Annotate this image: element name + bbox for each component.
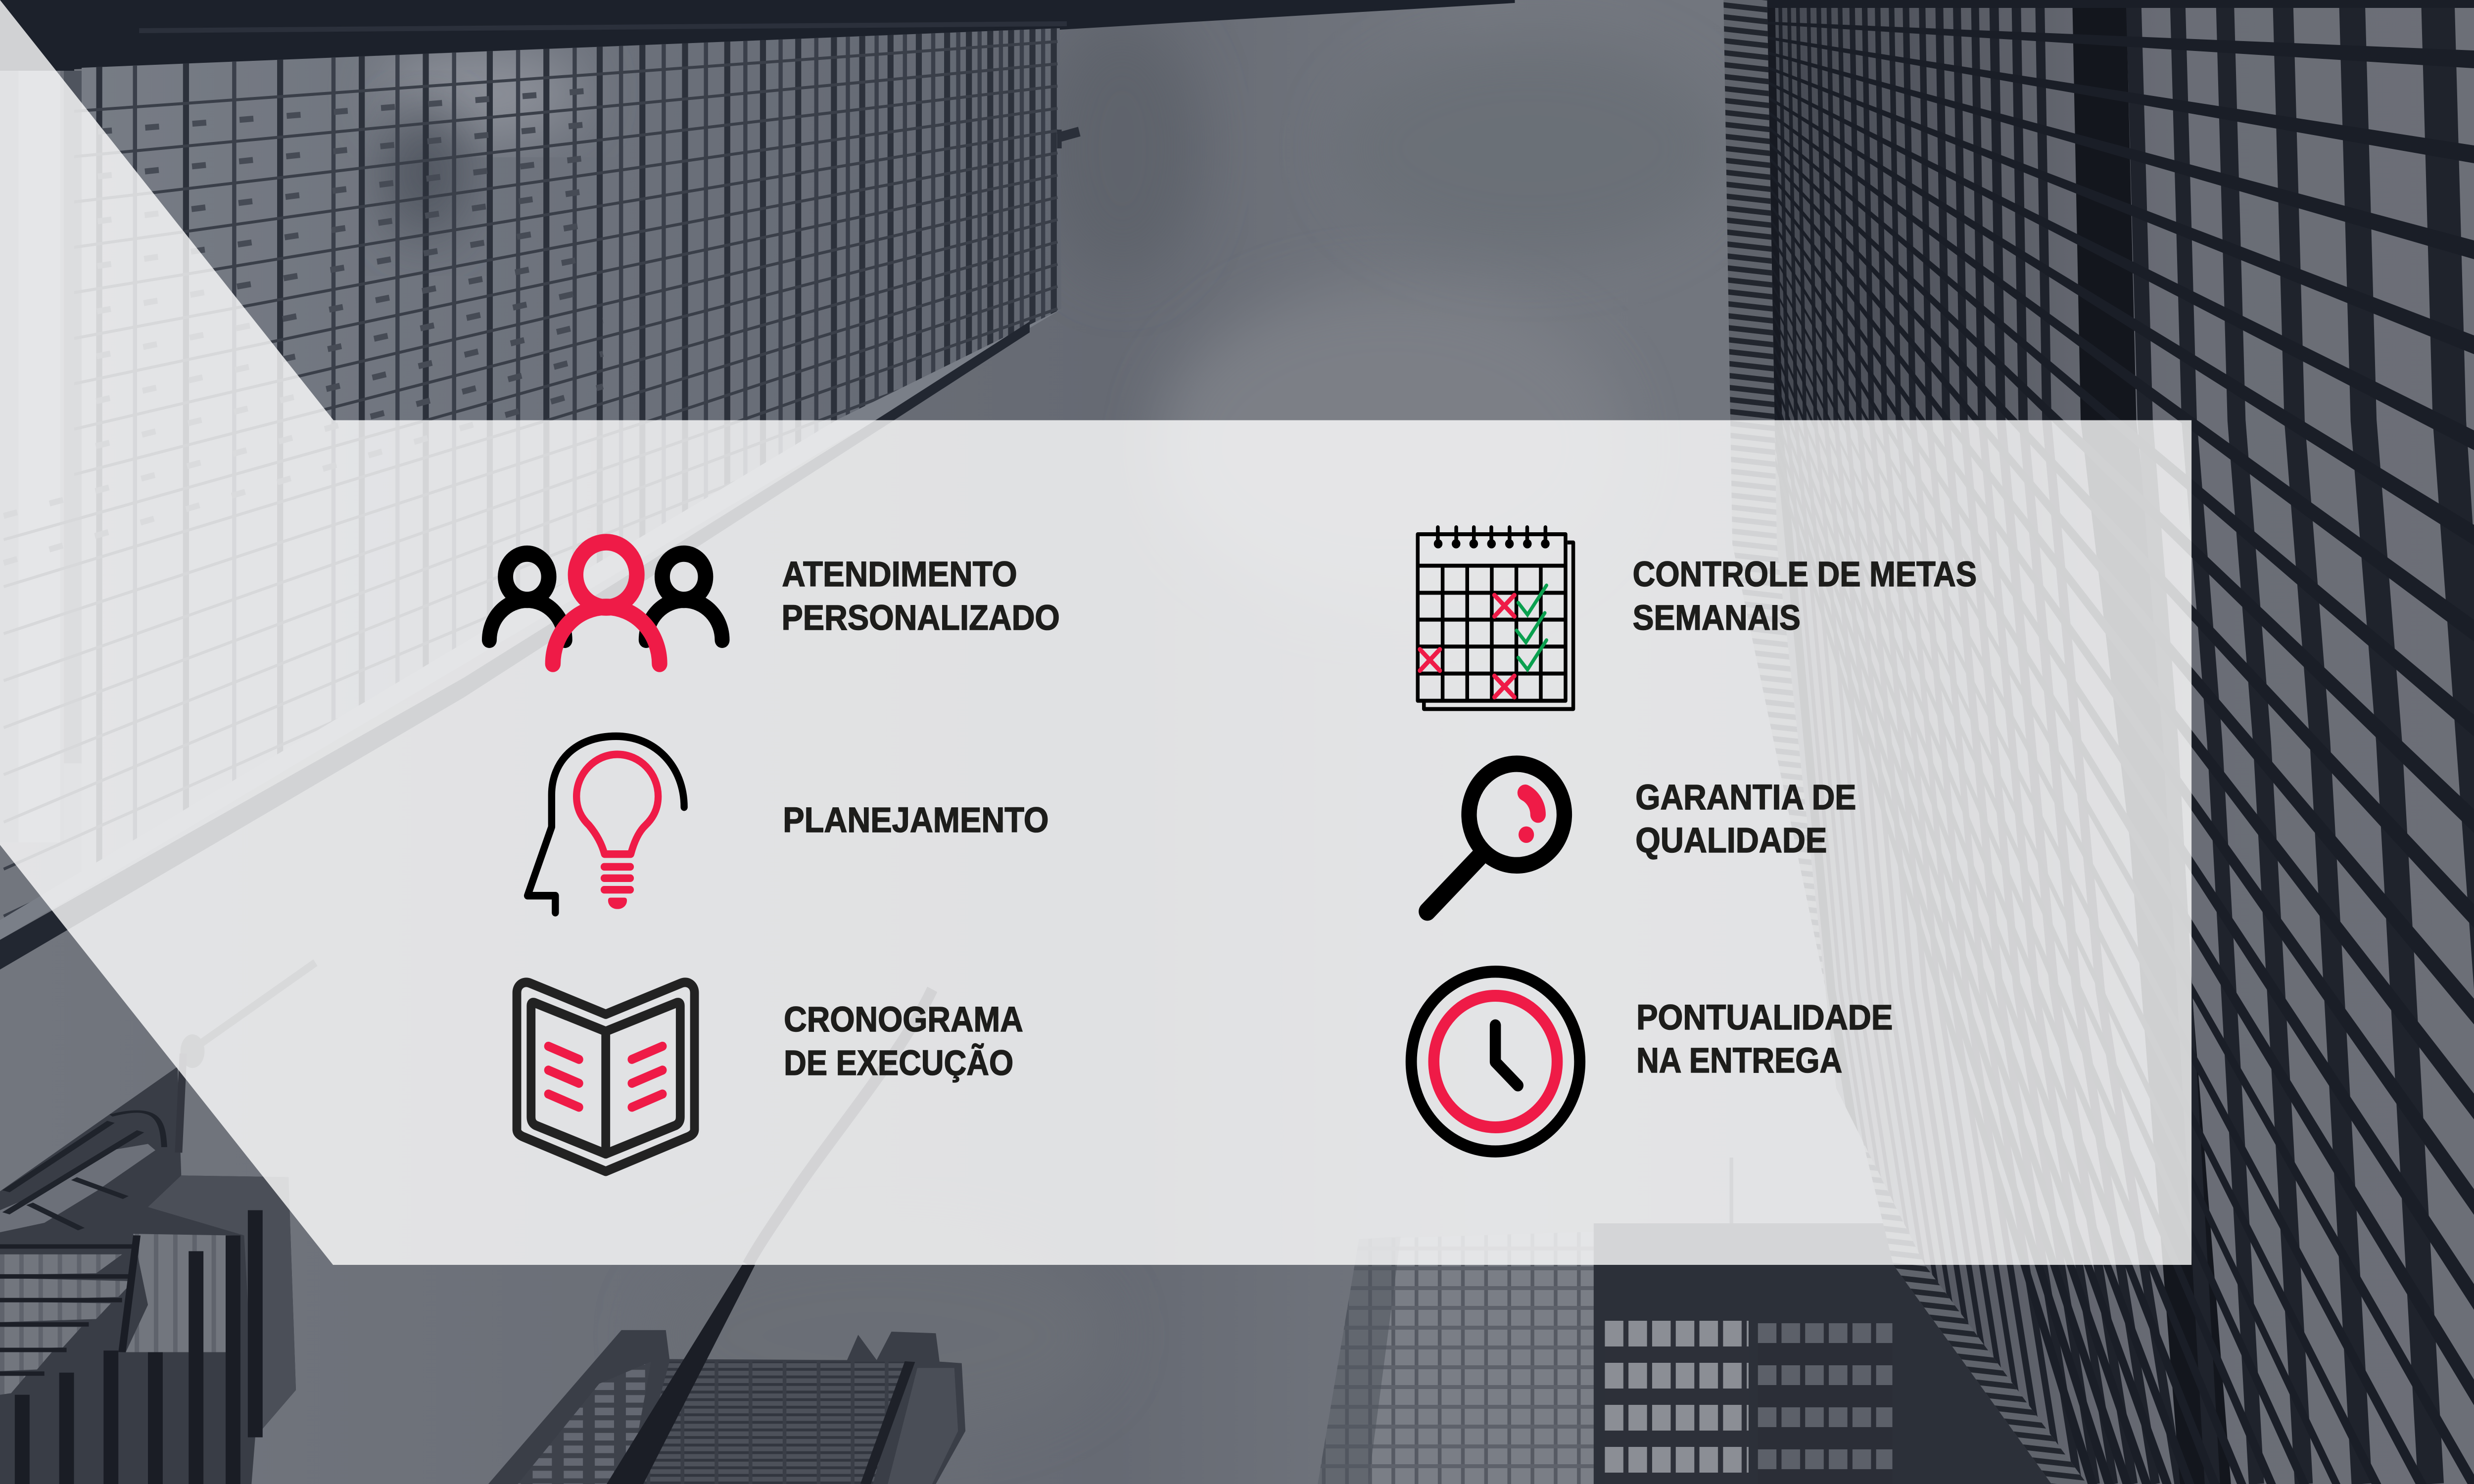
label: atendimento personalizado: ATENDIMENTO — [782, 555, 1017, 594]
label: garantia de qualidade: QUALIDADE — [1635, 821, 1827, 860]
icon: open book — [517, 982, 695, 1171]
service item: pontualidade na entrega — [1411, 972, 1893, 1152]
icon: calendar with marks — [1418, 527, 1573, 709]
label: pontualidade na entrega: PONTUALIDADE — [1636, 998, 1893, 1037]
label: garantia de qualidade: GARANTIA DE — [1635, 778, 1856, 817]
panel: translucent white angled overlay — [0, 0, 2191, 1265]
label: controle de metas semanais — [1633, 555, 1977, 637]
background photo: masts — [179, 963, 932, 1484]
background photo: right tower — [1723, 0, 2474, 1484]
service item: garantia de qualidade — [1427, 764, 1856, 912]
label: garantia de qualidade — [1635, 778, 1856, 860]
background photo: lower-left skyscraper and centre tower — [0, 1067, 965, 1484]
icon: head with light bulb — [527, 736, 684, 913]
icon: clock — [1411, 972, 1580, 1152]
label: controle de metas semanais: CONTROLE DE METAS — [1633, 555, 1977, 594]
label: cronograma de execucao: CRONOGRAMA — [784, 1000, 1023, 1039]
label: pontualidade na entrega: NA ENTREGA — [1636, 1041, 1842, 1080]
service item: planejamento — [527, 736, 1048, 913]
label: planejamento: PLANEJAMENTO — [783, 800, 1048, 839]
icon: magnifying glass with question mark — [1427, 764, 1564, 912]
service item: controle de metas semanais — [1418, 527, 1977, 709]
service item: atendimento personalizado — [489, 542, 1060, 664]
background photo: lower centre-right buildings — [1318, 1158, 2051, 1484]
service item: cronograma de execucao — [517, 982, 1023, 1171]
label: cronograma de execucao — [784, 1000, 1023, 1082]
label: atendimento personalizado — [781, 555, 1060, 637]
label: cronograma de execucao: DE EXECUÇÃO — [784, 1043, 1013, 1082]
label: atendimento personalizado: PERSONALIZADO — [781, 598, 1060, 637]
label: pontualidade na entrega — [1636, 998, 1893, 1080]
background photo: top-left tower — [0, 0, 1515, 970]
label: controle de metas semanais: SEMANAIS — [1633, 598, 1801, 637]
icon: three people — [489, 542, 722, 664]
